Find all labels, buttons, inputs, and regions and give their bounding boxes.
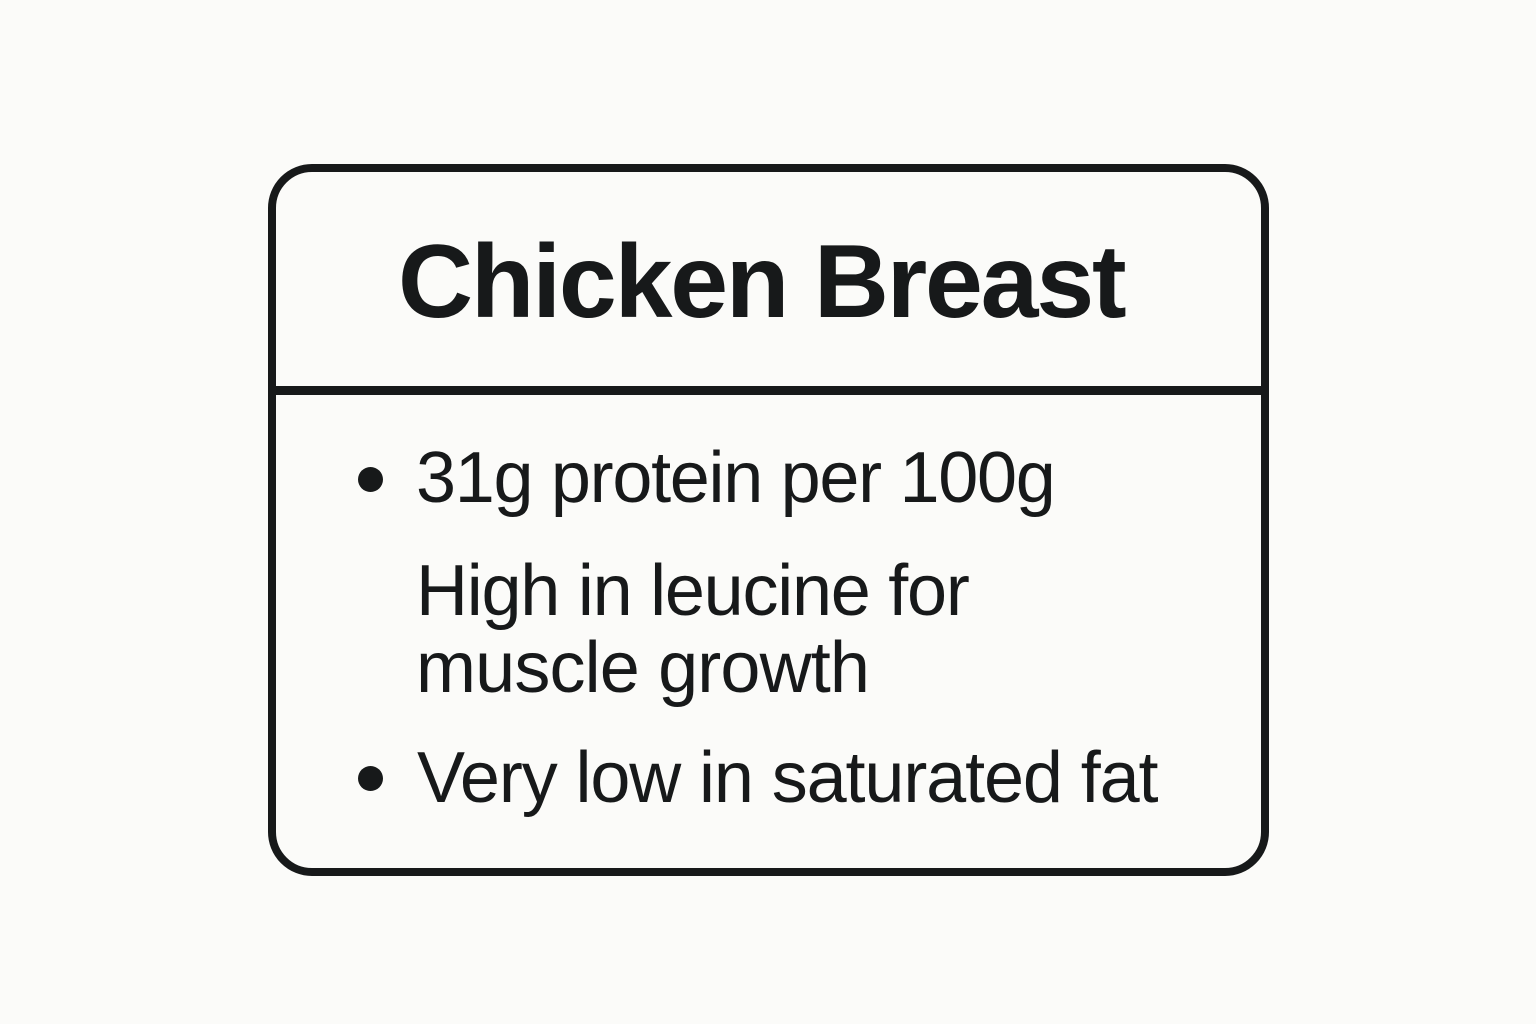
text: leucine: muscle growth [416,628,869,708]
text: leucine [416,551,969,708]
bullet: saturated fat [358,766,383,791]
text: protein: 31g protein per 100g [416,438,1055,518]
heading: Chicken Breast [398,224,1124,340]
bullet: protein [358,467,383,492]
text: leucine: High in leucine for [416,551,969,631]
divider line under heading [270,386,1266,395]
panel: chicken breast card [268,164,1269,876]
text: saturated fat: Very low in saturated fat [417,738,1157,818]
